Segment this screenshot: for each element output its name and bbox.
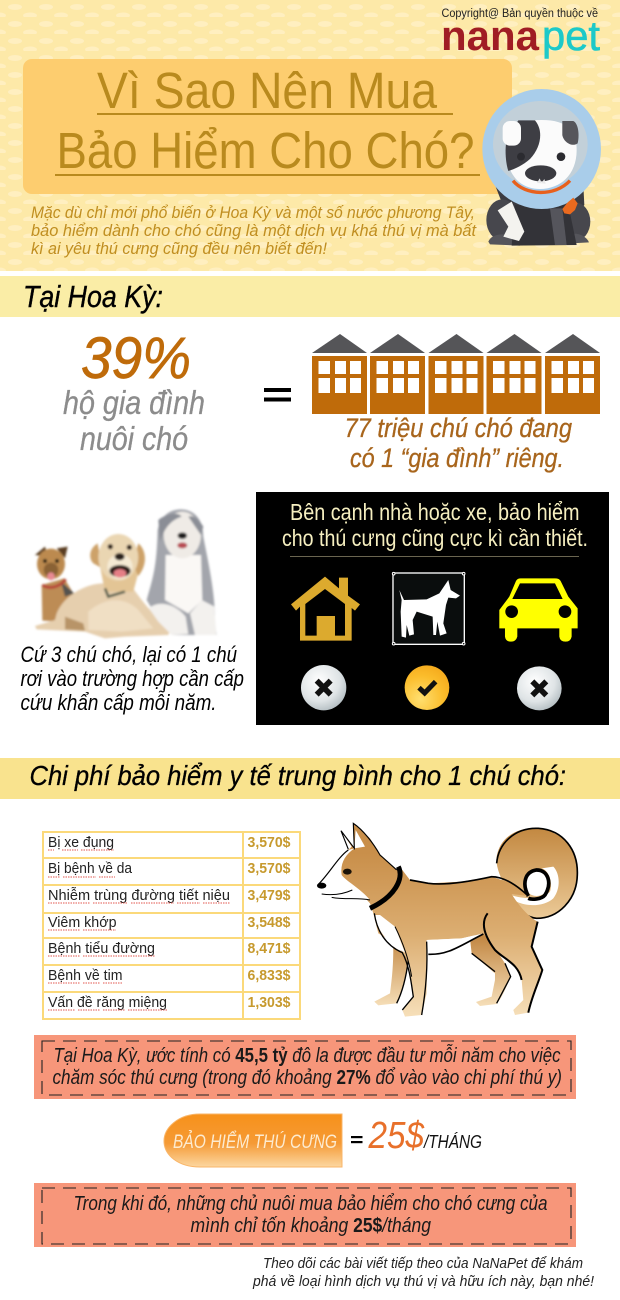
table values: 3,570$ [248,834,291,851]
text: one in three dogs: cứu khẩn cấp mỗi năm. [20,690,216,715]
intro text: Mặc dù chỉ mới phổ biến ở Hoa Kỳ và một số nước phương Tây, [31,203,475,222]
title panel [23,59,512,194]
table row labels: Bị bệnh về da [48,860,133,877]
price: 25 dollars per month: /THÁNG [422,1132,482,1152]
stat: 39 percent: hộ gia đình [63,384,205,421]
table values: 3,548$ [248,914,291,931]
footer note [252,1256,594,1290]
intro text: bảo hiểm dành cho chó cũng là một dịch vụ khá thú vị mà bất [31,221,477,240]
table values: 3,479$ [248,887,291,904]
logo: NaNaPet [441,12,600,59]
title text [55,62,480,179]
footer note: phá về loại hình dịch vụ thú vị và hữu ích này, bạn nhé! [252,1274,594,1290]
text: 77 million dogs: có 1 “gia đình” riêng. [350,443,564,473]
text: 77 million dogs [344,413,572,473]
stat: 39 percent [63,326,205,457]
tail [496,828,577,918]
footer note: Theo dõi các bài viết tiếp theo của NaNaPet để khám [263,1256,583,1272]
icon: dog with medical cone [482,89,601,246]
text: one in three dogs: rơi vào trường hợp cần cấp [20,666,244,691]
panel: insurance comparison [256,492,609,725]
illustration: standing dog [317,823,577,1017]
table row labels: Bị xe đụng [48,834,114,851]
text: one in three dogs [20,642,244,715]
panel text: Bên cạnh nhà hoặc xe, bảo hiểm [290,499,580,525]
table values: 1,303$ [248,994,291,1011]
intro text: kì ai yêu thú cưng cũng đều nên biết đến! [31,239,327,258]
price: 25 dollars per month [351,1115,482,1157]
stat: 39 percent: 39% [81,326,191,391]
title text: Vì Sao Nên Mua [97,62,438,119]
table: medical costs [42,831,300,1019]
callout text: chăm sóc thú cưng (trong đó khoảng 27% đổ vào vào chi phí thú y) [52,1067,562,1089]
callout text: Trong khi đó, những chủ nuôi mua bảo hiểm cho chó cưng của [74,1193,548,1215]
far hind leg [470,930,511,1006]
far front leg [374,947,408,1005]
table row labels: Vấn đề răng miệng [48,994,167,1011]
table values [248,834,291,1011]
callout text [52,1044,562,1089]
callout text: mình chỉ tốn khoảng 25$/tháng [190,1215,431,1237]
icon: car [499,578,578,642]
illustration: three dogs [35,509,217,638]
callout text: Tại Hoa Kỳ, ước tính có 45,5 tỷ đô la được đầu tư mỗi năm cho việc [54,1044,560,1067]
icon: cross button house [301,665,346,710]
text: 77 million dogs: 77 triệu chú chó đang [344,413,572,443]
icon: dog in selection box [392,572,465,645]
section heading: average cost: Chi phí bảo hiểm y tế trung bình cho 1 chú chó: [30,760,566,791]
callout: owner cost [34,1183,576,1247]
badge: pet insurance: BẢO HIỂM THÚ CƯNG [173,1131,337,1153]
table values: 8,471$ [248,940,291,957]
price: 25 dollars per month: 25$ [368,1115,425,1157]
table values: 6,833$ [248,967,291,984]
panel text [282,499,588,551]
badge: pet insurance [164,1114,342,1167]
white chest [375,915,405,953]
icon: check button dog [405,665,449,710]
ink outlines [370,867,400,908]
table row labels: Bệnh tiểu đường [48,940,155,957]
section heading: Tại Hoa Kỳ [0,276,620,317]
logo: NaNaPet: pet [542,12,600,59]
text: one in three dogs: Cứ 3 chú chó, lại có 1 chú [20,642,237,667]
callout text [74,1193,548,1237]
body, head and near legs [318,823,542,1017]
table row labels [48,834,230,1011]
table row labels: Nhiễm trùng đường tiết niệu [48,887,230,904]
icon: cross button car [517,666,562,710]
copyright text: Copyright@ Bản quyền thuộc về [442,8,598,20]
icon row: five houses [312,334,600,414]
white belly [427,933,483,954]
icon: house [291,577,360,641]
table row labels: Viêm khớp [48,914,116,931]
title text: Bảo Hiểm Cho Chó? [56,122,474,179]
stat: 39 percent: nuôi chó [80,420,188,457]
callout: total spending [34,1035,576,1099]
table values: 3,570$ [248,860,291,877]
section heading: Tại Hoa Kỳ: Tại Hoa Kỳ: [23,279,163,314]
white face mask [318,848,370,900]
logo: NaNaPet: nana [441,12,540,59]
header background [0,0,620,271]
table row labels: Bệnh về tim [48,967,122,984]
equals sign [264,388,291,402]
intro text [31,203,477,258]
